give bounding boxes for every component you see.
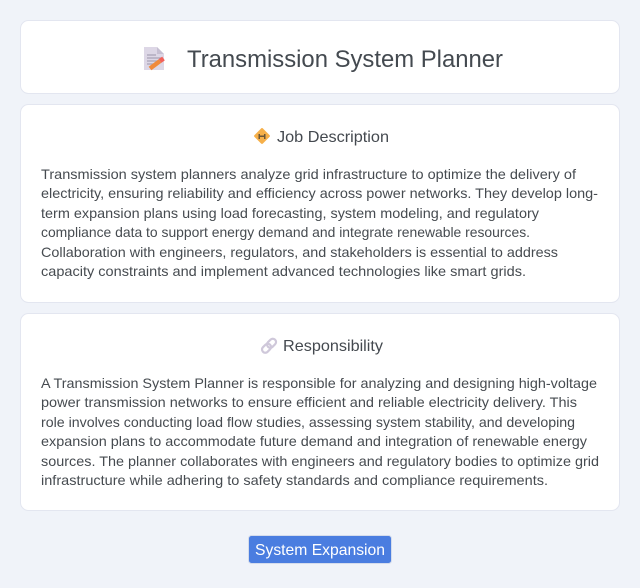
panel: responsibility (20, 314, 620, 510)
text block: responsibility: role involves conducting load flow studies, assessing system stability, and developing (41, 414, 575, 430)
text block: job description: compliance data to support energy demand and integrate renewable resources. (41, 224, 530, 240)
text block: responsibility (41, 375, 599, 488)
text block: job description: capacity constraints and implement advanced technologies like smart grids. (41, 263, 526, 279)
icon: chain link (261, 337, 277, 354)
heading: responsibility: Responsibility (283, 338, 383, 355)
text block: job description: Transmission system planners analyze grid infrastructure to optimize the delivery of (41, 166, 576, 182)
text block: responsibility: A Transmission System Planner is responsible for analyzing and designing high-voltage (41, 375, 597, 391)
icon: document with pencil (144, 47, 164, 70)
button: system expansion (248, 536, 392, 564)
panel: title (20, 20, 620, 94)
heading: job description: Job Description (277, 129, 389, 146)
icon: construction diamond (254, 128, 270, 144)
title text: Transmission System Planner (187, 46, 503, 73)
text block: job description: Collaboration with engineers, regulators, and stakeholders is essential to address (41, 244, 558, 260)
text block: job description: term expansion plans using load forecasting, system modeling, and regulatory (41, 205, 539, 221)
panel: job description (20, 104, 620, 302)
text block: responsibility: power transmission networks to ensure efficient and reliable electricity delivery. This (41, 394, 577, 410)
text block: responsibility: sources. The planner collaborates with engineers and regulatory bodies to optimize grid (41, 453, 599, 469)
text block: job description (41, 166, 598, 279)
text block: job description: electricity, ensuring reliability and efficiency across power networks. They develop long- (41, 185, 598, 201)
text block: responsibility: infrastructure while adhering to safety standards and compliance requirements. (41, 472, 548, 488)
text block: responsibility: expansion plans to accommodate future demand and integration of renewable energy (41, 433, 587, 449)
button: system expansion: System Expansion (255, 542, 385, 559)
